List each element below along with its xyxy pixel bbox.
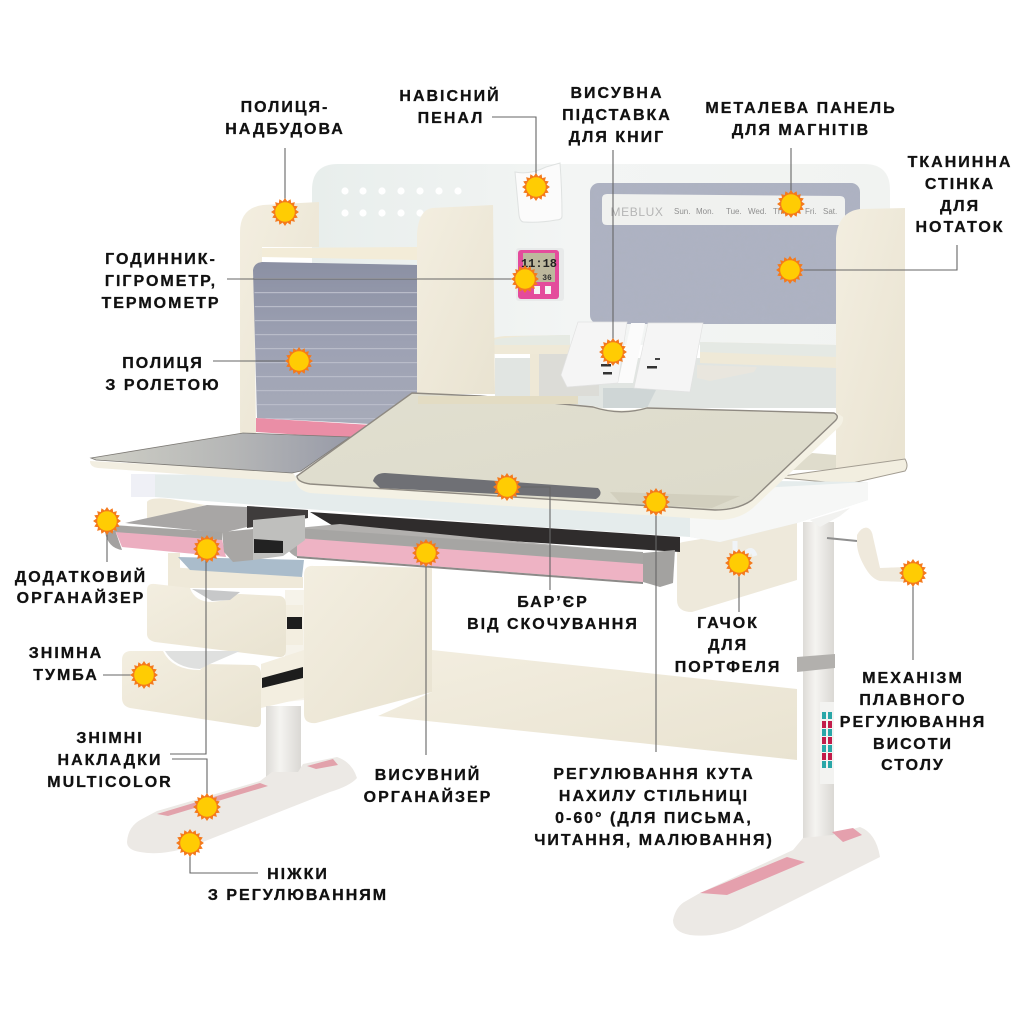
shelf with shutter bbox=[240, 202, 495, 438]
metal magnet strip: Thu. bbox=[773, 207, 789, 216]
label: removable pedestal: ТУМБА bbox=[33, 667, 99, 684]
label: multicolor pads: НАКЛАДКИ bbox=[58, 752, 162, 769]
back panel bbox=[312, 164, 890, 408]
metal magnet strip: Tue. bbox=[726, 207, 742, 216]
label: book stand: ПІДСТАВКА bbox=[562, 107, 672, 124]
large sliding organizer bbox=[282, 512, 680, 587]
leader lines bbox=[103, 117, 957, 873]
desk illustration bbox=[90, 163, 907, 936]
metal magnet strip: Fri. bbox=[805, 207, 817, 216]
clock hygrometer: 11:18 bbox=[521, 257, 557, 271]
drawer organizer left bbox=[105, 498, 308, 562]
label: shelf add-on: ПОЛИЦЯ- bbox=[241, 99, 329, 116]
label: removable pedestal: ЗНІМНА bbox=[29, 645, 103, 662]
left leg bbox=[127, 706, 357, 853]
removable pedestal bbox=[168, 553, 305, 702]
book stand bbox=[561, 322, 757, 392]
label: extra organizer: ОРГАНАЙЗЕР bbox=[17, 588, 145, 607]
top drawer bbox=[147, 584, 303, 657]
label: shutter shelf: З РОЛЕТОЮ bbox=[105, 377, 221, 394]
label: anti-roll barrier: ВІД СКОЧУВАННЯ bbox=[467, 616, 639, 633]
metal magnet strip: MEBLUX bbox=[611, 205, 663, 219]
label: multicolor pads: ЗНІМНІ bbox=[76, 730, 144, 747]
desk frame bbox=[131, 474, 868, 542]
backpack hook bbox=[735, 541, 755, 557]
hanging pencil case bbox=[515, 163, 562, 222]
label: hook: ДЛЯ bbox=[708, 637, 748, 654]
crossbar beam bbox=[378, 650, 797, 760]
label: book stand: ДЛЯ КНИГ bbox=[569, 129, 665, 146]
label: fabric wall: НОТАТОК bbox=[915, 219, 1005, 236]
label: height mechanism: МЕХАНІЗМ bbox=[862, 670, 964, 687]
label: tilt adjustment: ЧИТАННЯ, МАЛЮВАННЯ) bbox=[534, 832, 774, 849]
right leg bbox=[673, 508, 880, 936]
label: pencil case: НАВІСНИЙ bbox=[399, 86, 501, 105]
metal magnet strip: Wed. bbox=[748, 207, 767, 216]
label: height mechanism: ВИСОТИ bbox=[873, 736, 953, 753]
label: sliding organizer: ВИСУВНИЙ bbox=[375, 765, 481, 784]
label: hook: ГАЧОК bbox=[697, 615, 759, 632]
label: metal panel: МЕТАЛЕВА ПАНЕЛЬ bbox=[705, 100, 897, 117]
label: tilt adjustment: НАХИЛУ СТІЛЬНИЦІ bbox=[559, 788, 749, 805]
label: extra organizer: ДОДАТКОВИЙ bbox=[15, 567, 147, 586]
side hanging panel bbox=[677, 523, 797, 612]
label: shutter shelf: ПОЛИЦЯ bbox=[122, 355, 204, 372]
labels bbox=[15, 85, 1012, 904]
label: height mechanism: СТОЛУ bbox=[881, 757, 945, 774]
left desk top bbox=[90, 433, 350, 482]
metal magnet strip: Sun. bbox=[674, 207, 690, 216]
metal magnet strip: Mon. bbox=[696, 207, 714, 216]
shelf right panel bbox=[836, 208, 905, 470]
label: fabric wall: СТІНКА bbox=[925, 176, 995, 193]
metal magnet strip: Sat. bbox=[823, 207, 837, 216]
label: clock: ТЕРМОМЕТР bbox=[101, 295, 221, 312]
label: adjustable legs: З РЕГУЛЮВАННЯМ bbox=[208, 887, 388, 904]
organizer side panel bbox=[304, 566, 432, 723]
label: height mechanism: ПЛАВНОГО bbox=[859, 692, 967, 709]
label: metal panel: ДЛЯ МАГНІТІВ bbox=[732, 122, 870, 139]
clock hygrometer: 36 bbox=[542, 274, 552, 283]
label: hook: ПОРТФЕЛЯ bbox=[675, 659, 781, 676]
small shelf bbox=[488, 335, 836, 408]
metal magnet strip bbox=[602, 194, 845, 225]
marker suns bbox=[93, 173, 927, 857]
height crank bbox=[827, 528, 907, 582]
label: multicolor pads: MULTICOLOR bbox=[47, 774, 173, 791]
label: height mechanism: РЕГУЛЮВАННЯ bbox=[840, 714, 986, 731]
right desk end bbox=[783, 453, 907, 484]
label: tilt adjustment: 0-60° (ДЛЯ ПИСЬМА, bbox=[555, 810, 753, 827]
label: clock: ГІГРОМЕТР, bbox=[105, 273, 217, 290]
label: fabric wall: ДЛЯ bbox=[940, 198, 980, 215]
label: book stand: ВИСУВНА bbox=[570, 85, 664, 102]
label: pencil case: ПЕНАЛ bbox=[418, 110, 484, 127]
label: clock: ГОДИННИК- bbox=[105, 251, 217, 268]
tilted table top bbox=[295, 393, 843, 520]
label: adjustable legs: НІЖКИ bbox=[267, 866, 329, 883]
label: sliding organizer: ОРГАНАЙЗЕР bbox=[364, 787, 492, 806]
label: tilt adjustment: РЕГУЛЮВАННЯ КУТА bbox=[553, 766, 755, 783]
bottom drawer bbox=[122, 650, 304, 727]
label: shelf add-on: НАДБУДОВА bbox=[225, 121, 345, 138]
fabric notes wall bbox=[590, 183, 860, 324]
label: fabric wall: ТКАНИННА bbox=[908, 154, 1012, 171]
clock hygrometer bbox=[516, 248, 564, 301]
label: anti-roll barrier: БАР’ЄР bbox=[517, 594, 589, 611]
